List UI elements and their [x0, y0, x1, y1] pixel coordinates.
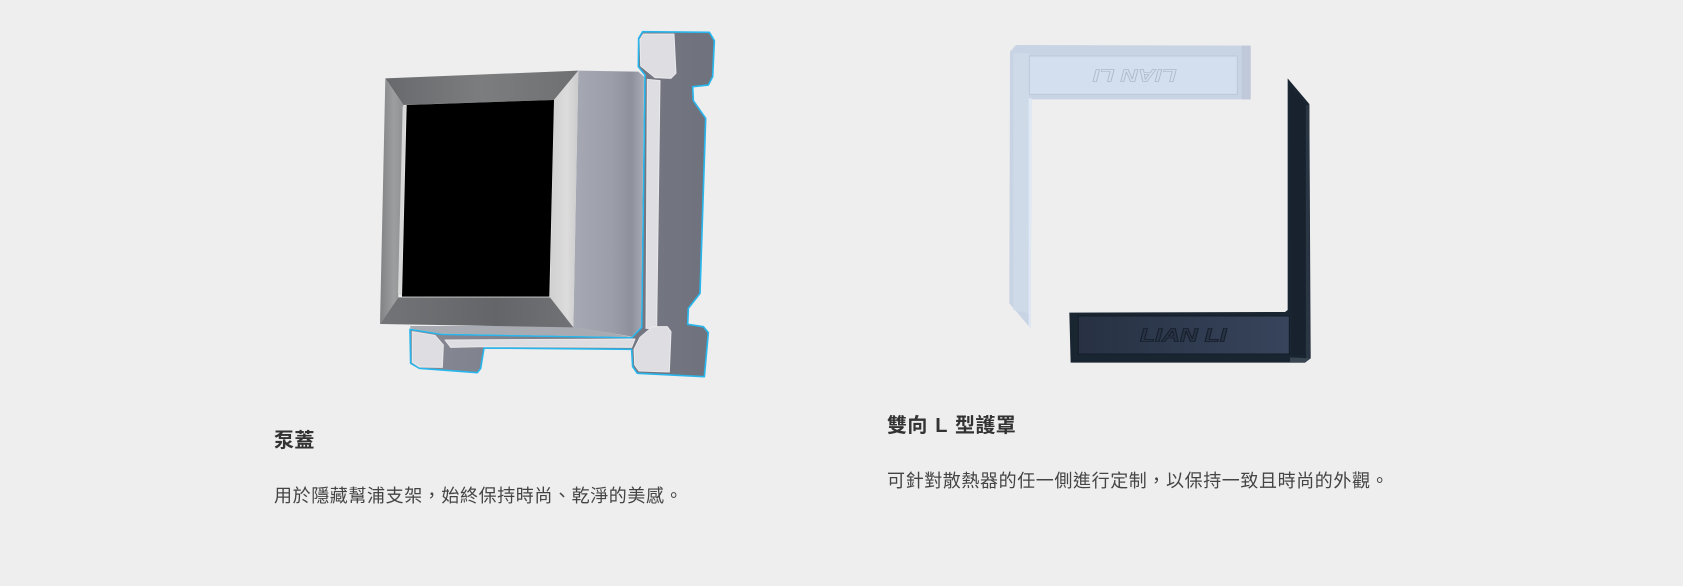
light frame strips [412, 34, 676, 372]
heading: L-shaped cover: 雙向 L 型護罩 [887, 415, 1016, 437]
light L-shaped cover: LIAN LI [1092, 66, 1177, 86]
panel: L-shaped covers product image [1009, 45, 1311, 363]
pump LCD screen [402, 100, 554, 297]
pump cover outline with blue highlight [410, 32, 714, 377]
pump metal frame [380, 71, 578, 327]
dark L-shaped cover: LIAN LI [1140, 324, 1228, 345]
panel: pump cover product image [380, 32, 714, 377]
text: pump cover description: 用於隱藏幫浦支架，始終保持時尚、乾淨的美感。 [274, 486, 683, 506]
pump body underside [410, 326, 632, 337]
text: L-shaped cover description: 可針對散熱器的任一側進行定制，以保持一致且時尚的外觀。 [887, 471, 1389, 491]
heading: pump cover: 泵蓋 [274, 430, 315, 452]
pump body side [573, 71, 644, 337]
light L-shaped cover [1009, 45, 1251, 328]
dark L-shaped cover [1069, 78, 1311, 363]
